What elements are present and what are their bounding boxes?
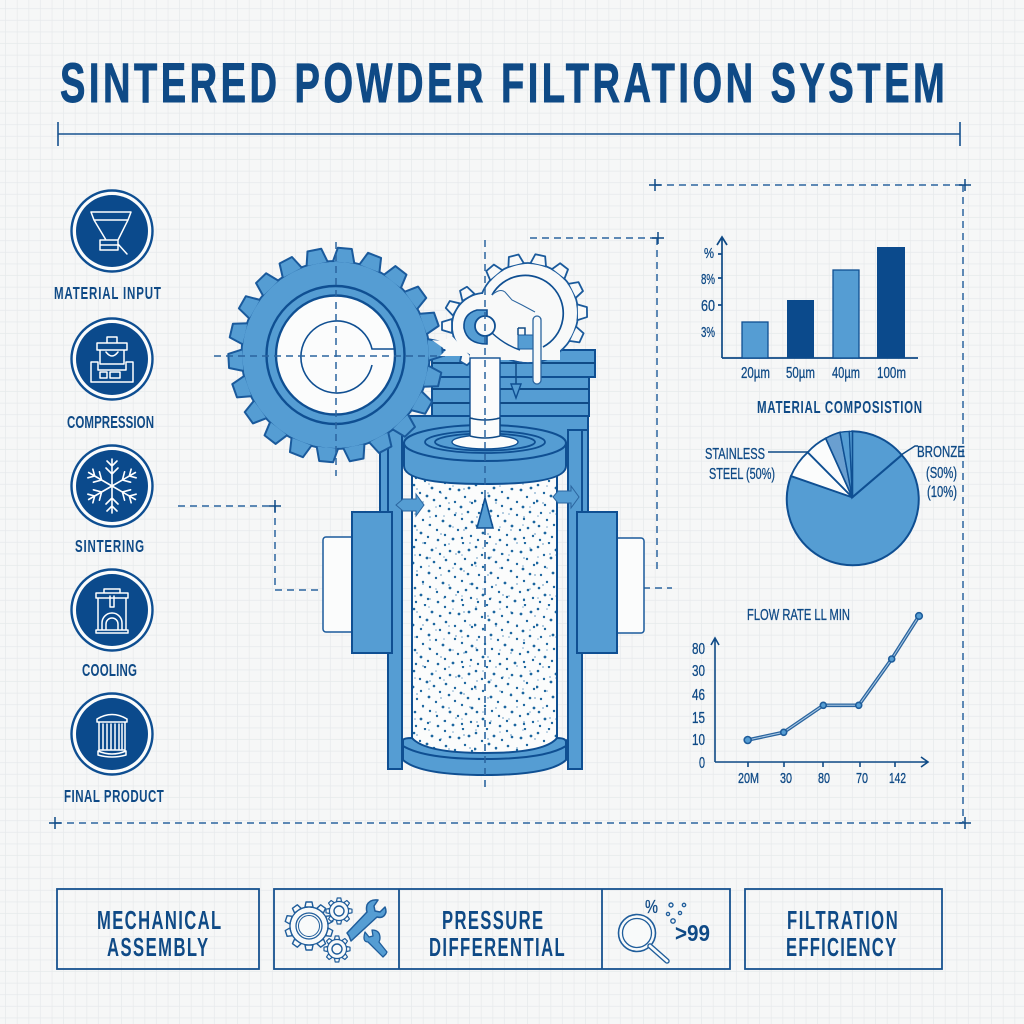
line series xyxy=(744,613,922,744)
large gear xyxy=(214,242,445,476)
bar chart axis labels: 50µm xyxy=(786,365,815,382)
icon: gears and wrenches xyxy=(285,898,387,962)
right small gear teeth xyxy=(478,254,587,363)
bar chart axis labels: % xyxy=(704,245,714,262)
bottom panel: mechanical assembly xyxy=(57,889,259,969)
material composition heading: MATERIAL COMPOSISTION xyxy=(757,398,922,418)
bar chart axis labels xyxy=(701,245,906,382)
bar chart xyxy=(701,237,918,382)
bottom panel: pressure differential: DIFFERENTIAL xyxy=(429,932,565,962)
step: cooling: COOLING xyxy=(82,661,137,681)
bottom panel: mechanical assembly: MECHANICAL xyxy=(97,905,221,935)
side clamps right xyxy=(577,512,644,653)
small gears xyxy=(432,254,587,398)
line chart axis labels: 0 xyxy=(699,755,705,772)
line chart axis labels: 30 xyxy=(692,663,705,680)
line chart axis labels xyxy=(692,641,906,787)
bar chart axis labels: 3% xyxy=(701,324,715,341)
pie labels: (S0%) xyxy=(926,465,957,482)
step: final product: FINAL PRODUCT xyxy=(64,787,164,807)
bar chart axis labels: 100m xyxy=(877,365,906,382)
bar chart axis labels: 20µm xyxy=(741,365,770,382)
step: material input xyxy=(54,190,161,304)
bottom panel: pressure differential xyxy=(274,889,730,969)
line chart axis labels: 20M xyxy=(738,770,759,787)
line chart axis labels: 15 xyxy=(692,710,705,727)
pie chart xyxy=(705,431,965,565)
line chart axis labels: 142 xyxy=(889,770,906,787)
pie labels xyxy=(705,444,965,501)
bottom panel: filtration efficiency: EFFICIENCY xyxy=(786,932,896,962)
step: compression xyxy=(67,318,154,433)
bar chart axis labels: 60 xyxy=(701,298,715,315)
step: compression: COMPRESSION xyxy=(67,413,154,433)
step: sintering xyxy=(72,446,152,557)
bars xyxy=(742,247,905,358)
step: sintering: SINTERING xyxy=(75,537,144,557)
line chart: FLOW RATE LL MIN xyxy=(747,607,850,624)
merged white gear body xyxy=(432,336,560,360)
bar chart axis labels: 8% xyxy=(701,271,715,288)
process steps column xyxy=(54,190,164,807)
bottom panel: filtration efficiency xyxy=(745,889,942,969)
top cap xyxy=(404,418,566,500)
left small gear teeth xyxy=(442,285,518,367)
line chart axis labels: 46 xyxy=(692,687,705,704)
line chart axis labels: 80 xyxy=(818,770,830,787)
line chart axis labels: 30 xyxy=(780,770,792,787)
step: cooling xyxy=(72,570,152,681)
line chart axis labels: 80 xyxy=(692,641,705,658)
line chart axis labels: 70 xyxy=(856,770,868,787)
bar chart axis labels: 40µm xyxy=(832,365,860,382)
bottom panel: mechanical assembly: ASSEMBLY xyxy=(107,932,208,962)
central shaft xyxy=(470,240,500,440)
bottom panel: filtration efficiency: FILTRATION xyxy=(787,905,898,935)
title: SINTERED POWDER FILTRATION SYSTEM xyxy=(60,53,945,115)
side clamps left xyxy=(323,512,392,653)
pie labels: (10%) xyxy=(927,484,957,501)
icon: magnifier and particles: >99 xyxy=(675,920,710,946)
flow arrows xyxy=(396,486,579,790)
filter body with sintered powder xyxy=(412,470,557,755)
icon: magnifier and particles xyxy=(618,897,710,961)
step: material input: MATERIAL INPUT xyxy=(54,284,161,304)
icon: magnifier and particles: % xyxy=(645,897,658,917)
bottom panel: pressure differential: PRESSURE xyxy=(442,905,543,935)
bottom base xyxy=(403,738,566,775)
frame and upper housing xyxy=(380,350,595,769)
step: final product xyxy=(64,694,164,807)
pie labels: STAINLESS xyxy=(705,446,765,463)
central filter machine diagram xyxy=(214,240,644,790)
pie labels: STEEL (50%) xyxy=(709,466,775,483)
line chart axis labels: 10 xyxy=(692,732,705,749)
line chart xyxy=(692,607,928,787)
pie labels: BRONZE xyxy=(917,444,965,461)
